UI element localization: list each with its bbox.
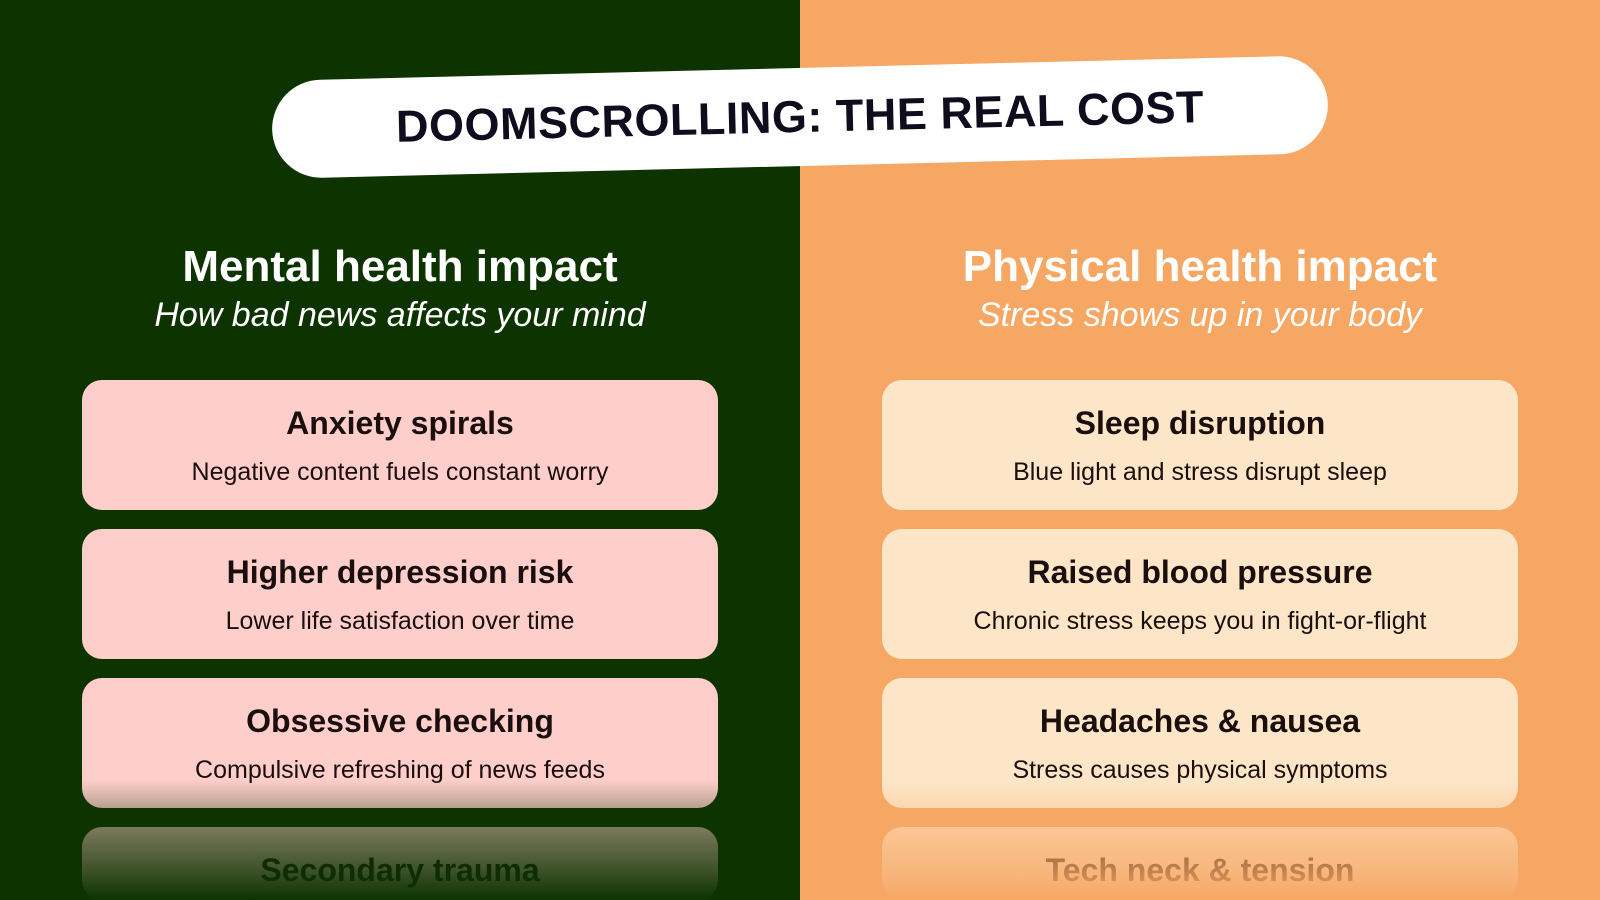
panel: mental health [82,242,718,895]
title pill [271,55,1329,179]
card: sleep: Sleep disruption [1075,405,1325,441]
card: anxiety: Negative content fuels constant worry [192,458,608,486]
card: depression: Lower life satisfaction over time [226,607,574,635]
card: sleep: Blue light and stress disrupt sleep [1013,458,1387,486]
card: trauma [82,827,718,900]
card: trauma: Secondary trauma [260,852,540,888]
card: anxiety: Anxiety spirals [286,405,514,441]
card: tech neck: Tech neck & tension [1046,852,1354,888]
heading: mental: How bad news affects your mind [154,296,646,334]
card: obsessive: Obsessive checking [246,703,554,739]
panel: physical health [882,242,1518,890]
heading: physical: Physical health impact [963,242,1437,291]
card: obsessive: Compulsive refreshing of news feeds [195,756,605,784]
card: blood pressure [882,529,1518,659]
card: obsessive [82,678,718,808]
card: depression: Higher depression risk [227,554,573,590]
heading: mental: Mental health impact [182,242,618,291]
title pill: DOOMSCROLLING: THE REAL COST [395,81,1205,152]
card: headaches: Stress causes physical symptoms [1012,756,1388,784]
heading: physical [963,242,1437,334]
card: sleep [882,380,1518,510]
heading: mental [154,242,647,334]
card: tech neck [882,827,1518,900]
card: blood pressure: Chronic stress keeps you in fight-or-flight [974,607,1426,635]
card: anxiety [82,380,718,510]
card: headaches [882,678,1518,808]
card: headaches: Headaches & nausea [1040,703,1360,739]
heading: physical: Stress shows up in your body [978,296,1422,334]
card: blood pressure: Raised blood pressure [1028,554,1372,590]
card: depression [82,529,718,659]
